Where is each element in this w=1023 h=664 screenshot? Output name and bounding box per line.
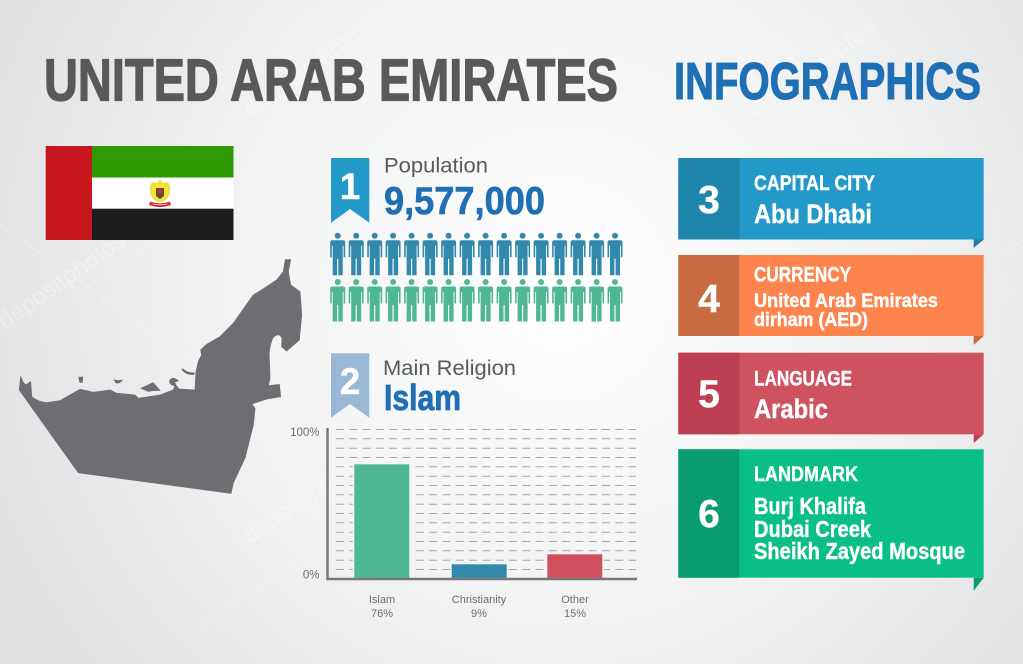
bar chart: religion shares (290, 427, 637, 620)
bar: Christianity 9% (452, 564, 507, 578)
panel: currency: United Arab Emirates (754, 291, 938, 312)
bar: Other 15% (547, 554, 602, 578)
category label: Christianity: Christianity (452, 594, 506, 606)
panel: currency: CURRENCY (754, 262, 851, 286)
flag of the UAE (46, 146, 234, 240)
panel: currency: dirham (AED) (754, 310, 868, 331)
label: Main Religion: Main Religion (383, 357, 516, 380)
category label: Other: Other (561, 594, 589, 606)
value: Islam: Islam (384, 377, 461, 418)
panel: capital city (678, 158, 984, 248)
ribbon badge 2: 2 (340, 361, 360, 402)
panel: capital city: CAPITAL CITY (754, 171, 875, 195)
icon: flag emblem (149, 180, 171, 207)
panel: language (678, 353, 984, 443)
panel: language: Arabic (754, 394, 828, 424)
panel: landmark: 6 (698, 493, 720, 536)
text: depositphotos (238, 15, 376, 123)
bar: Islam 76% (354, 464, 409, 578)
ribbon badge 2 (331, 353, 369, 418)
panel: landmark: Burj Khalifa (754, 493, 866, 519)
panel: capital city: 3 (698, 179, 720, 222)
panel: landmark: Dubai Creek (754, 516, 871, 542)
category label: Islam: 76% (371, 608, 393, 620)
ribbon badge 1: 1 (340, 166, 360, 207)
panel: currency: 4 (698, 278, 720, 321)
panel: currency (678, 255, 984, 345)
category label: Christianity: 9% (471, 608, 487, 620)
category label: Islam: Islam (369, 594, 395, 606)
ribbon badge 1 (331, 158, 369, 223)
panel: capital city: Abu Dhabi (754, 199, 872, 229)
text: depositphotos (238, 442, 376, 550)
pictogram row: green people (330, 279, 622, 322)
pictogram row: blue people (330, 233, 622, 275)
axis label 100%: 100% (290, 427, 320, 439)
text: depositphotos (743, 15, 881, 123)
panel: language: 5 (698, 373, 720, 416)
panel: landmark (678, 449, 984, 591)
title: United Arab Emirates: UNITED ARAB EMIRATES (44, 48, 618, 114)
value: population count: 9,577,000 (384, 180, 545, 223)
panel: landmark: Sheikh Zayed Mosque (754, 538, 965, 564)
map of the UAE (19, 260, 302, 493)
panel: landmark: LANDMARK (754, 462, 858, 486)
label: Population: Population (384, 154, 488, 178)
axis label 0%: 0% (303, 570, 320, 582)
category label: Other: 15% (564, 608, 586, 620)
panel: language: LANGUAGE (754, 366, 852, 390)
